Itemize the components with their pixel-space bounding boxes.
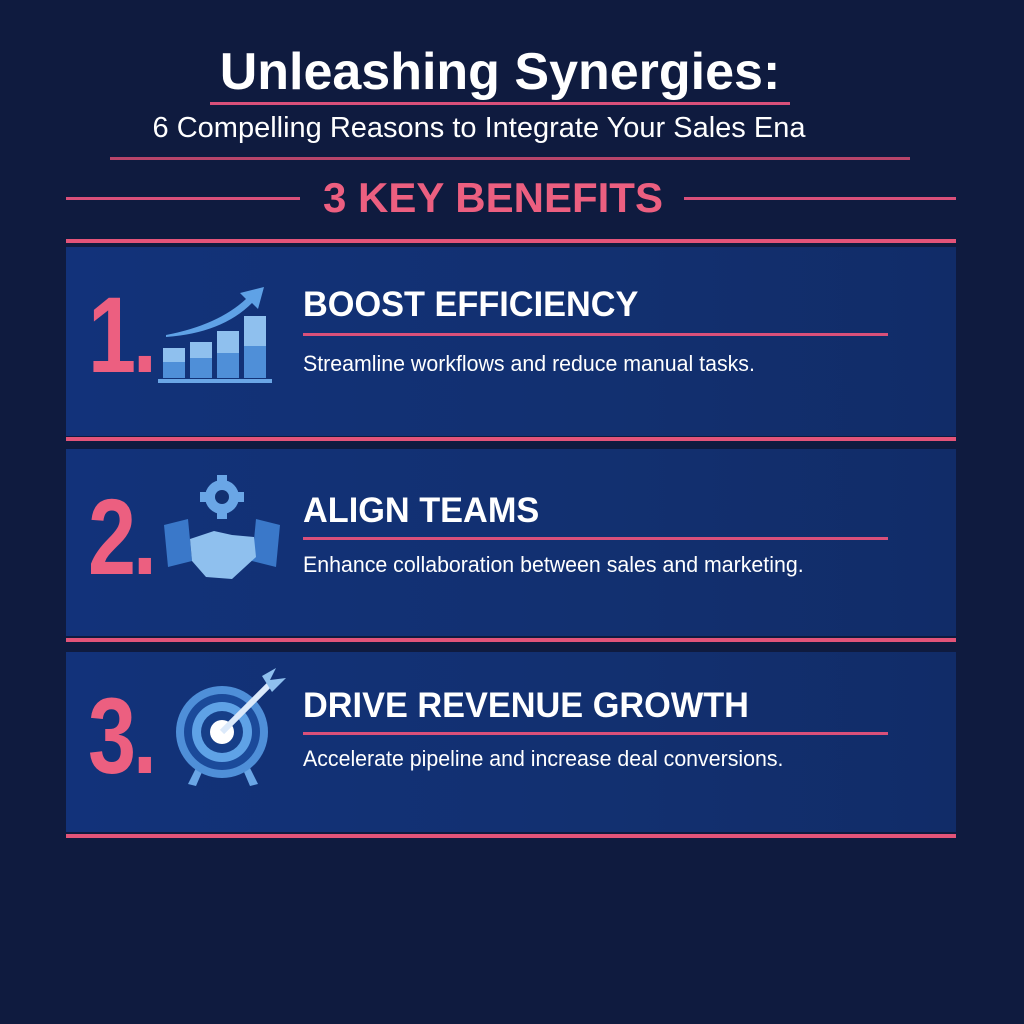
description: Streamline workflows and reduce manual tasks. [303,351,755,376]
panel: boost efficiency [66,247,956,436]
number 1: 1. [88,274,154,395]
icon: handshake with gear [164,475,280,579]
panel: drive revenue growth [66,652,956,832]
heading: ALIGN TEAMS [303,491,539,530]
title: Unleashing Synergies: [220,43,780,101]
heading: DRIVE REVENUE GROWTH [303,686,749,725]
description: Enhance collaboration between sales and marketing. [303,552,804,577]
heading: BOOST EFFICIENCY [303,285,638,324]
icon: bar chart [158,287,272,383]
icon: target [176,668,286,786]
subtitle: 6 Compelling Reasons to Integrate Your Sales Ena [153,112,805,144]
heading: 3 key benefits: 3 KEY BENEFITS [323,174,663,221]
number 2: 2. [88,476,154,597]
description: Accelerate pipeline and increase deal conversions. [303,746,783,771]
panel: align teams [66,449,956,636]
number 3: 3. [88,675,154,796]
